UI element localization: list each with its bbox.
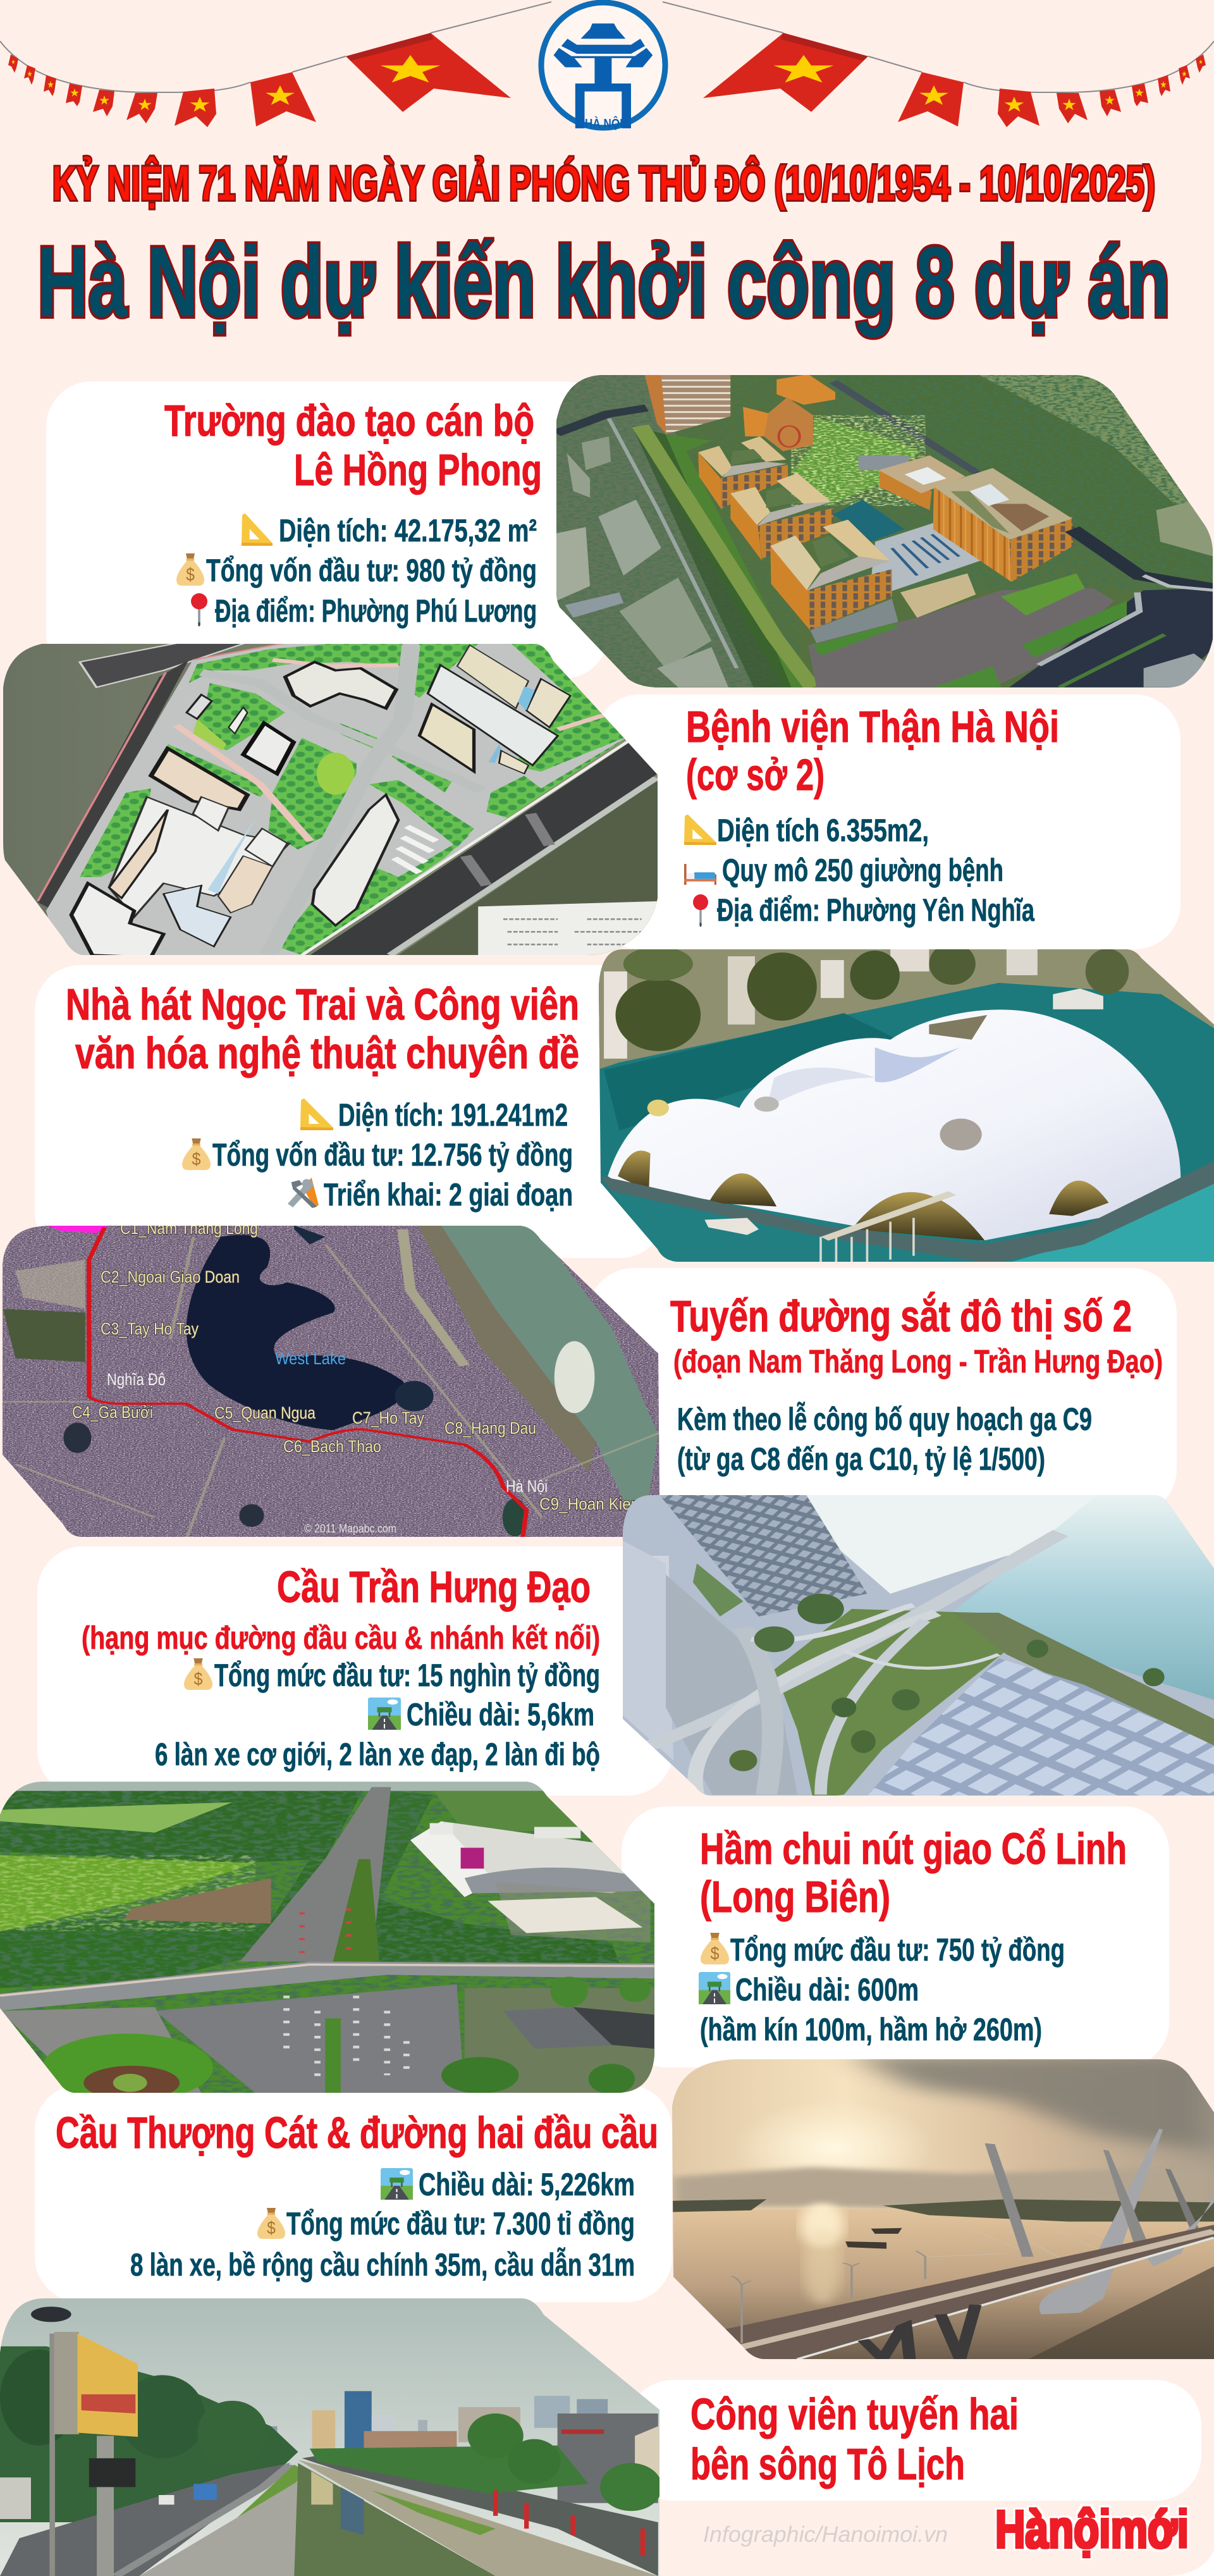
photo: Tô Lịch river <box>0 2296 670 2576</box>
heading: Công viên tuyến hai <box>690 2389 1019 2439</box>
facts: Tổng mức đầu tư: 750 tỷ đồng <box>730 1932 1065 1968</box>
heading: Lê Hồng Phong <box>294 445 542 495</box>
map labels: Nghĩa Đô <box>107 1370 166 1389</box>
heading <box>690 2389 1019 2489</box>
facts: Triển khai: 2 giai đoạn <box>324 1177 573 1212</box>
photo: campus render <box>555 373 1214 689</box>
photo: Thượng Cát bridge sunset render <box>666 2055 1214 2362</box>
facts: Tổng vốn đầu tư: 12.756 tỷ đồng <box>212 1137 573 1173</box>
map labels: C1_Nam Thang Long <box>120 1219 258 1238</box>
map: metro line 2 route <box>0 1219 666 1540</box>
map labels: C7_Ho Tay <box>352 1408 424 1427</box>
map labels: C2_Ngoai Giao Doan <box>101 1267 240 1286</box>
facts: 8 làn xe, bề rộng cầu chính 35m, cầu dẫn 31m <box>130 2247 635 2283</box>
map labels: C6_Bach Thao <box>283 1437 381 1456</box>
panel: Cầu Trần Hưng Đạo <box>37 1546 673 1796</box>
logo: Hà Nội emblem: HÀ NỘI <box>585 116 623 131</box>
facts <box>155 1658 600 1772</box>
map labels: West Lake <box>275 1349 346 1368</box>
map labels: C4_Ga Bưởi <box>72 1403 153 1422</box>
photo: pearl theatre render <box>589 943 1214 1266</box>
heading: Cầu Thượng Cát & đường hai đầu cầu <box>56 2108 658 2157</box>
facts: Diện tích 6.355m2, <box>717 813 929 848</box>
heading: Trường đào tạo cán bộ <box>164 396 534 445</box>
bunting: right flags <box>663 2 1214 127</box>
facts: (từ ga C8 đến ga C10, tỷ lệ 1/500) <box>677 1441 1045 1477</box>
heading <box>686 702 1059 799</box>
facts <box>182 1097 573 1212</box>
panel: Hầm chui nút giao Cổ Linh <box>622 1806 1169 2068</box>
heading <box>164 396 542 495</box>
facts <box>130 2167 635 2283</box>
photo: Cổ Linh interchange aerial <box>0 1780 662 2102</box>
facts <box>677 1402 1092 1477</box>
panel: Bệnh viện Thận Hà Nội <box>594 694 1180 949</box>
heading <box>82 1562 600 1656</box>
heading <box>700 1824 1127 1921</box>
map labels: C8_Hang Dau <box>445 1419 536 1438</box>
credit: Infographic/Hanoimoi.vn <box>703 2522 948 2547</box>
facts: Địa điểm: Phường Yên Nghĩa <box>717 892 1035 928</box>
facts: Chiều dài: 5,6km <box>407 1697 594 1732</box>
heading: Bệnh viện Thận Hà Nội <box>686 702 1059 751</box>
photo: hospital site plan <box>0 641 658 957</box>
bunting: left flags <box>0 2 551 127</box>
facts <box>684 813 1035 928</box>
facts <box>176 513 537 629</box>
heading: Cầu Trần Hưng Đạo <box>277 1562 591 1612</box>
map labels <box>72 1219 644 1535</box>
heading: (cơ sở 2) <box>686 750 825 799</box>
photo: Trần Hưng Đạo bridge render <box>620 1493 1214 1799</box>
map labels: © 2011 Mapabc.com <box>304 1522 396 1535</box>
facts: Địa điểm: Phường Phú Lương <box>215 593 537 629</box>
heading: Nhà hát Ngọc Trai và Công viên <box>66 980 579 1029</box>
logo: Hà Nội emblem <box>541 3 665 131</box>
heading: bên sông Tô Lịch <box>690 2439 965 2489</box>
facts: Diện tích: 42.175,32 m² <box>279 513 537 548</box>
facts: Tổng mức đầu tư: 15 nghìn tỷ đồng <box>214 1658 600 1693</box>
map labels: C9_Hoan Kiem <box>539 1494 644 1513</box>
facts: Tổng vốn đầu tư: 980 tỷ đồng <box>206 553 537 588</box>
heading <box>66 980 579 1078</box>
facts: Diện tích: 191.241m2 <box>338 1097 568 1133</box>
heading <box>670 1291 1163 1379</box>
panel: Tuyến đường sắt đô thị số 2 <box>588 1268 1177 1515</box>
facts: Tổng mức đầu tư: 7.300 tỉ đồng <box>286 2206 635 2241</box>
heading: (Long Biên) <box>700 1872 890 1921</box>
facts: (hầm kín 100m, hầm hở 260m) <box>700 2012 1042 2047</box>
facts <box>699 1932 1065 2047</box>
facts: Chiều dài: 5,226km <box>419 2167 635 2202</box>
panel: Trường đào tạo cán bộ Lê Hồng Phong <box>46 381 609 679</box>
map labels: C3_Tay Ho Tay <box>101 1319 199 1338</box>
map labels: Hà Nội <box>506 1477 548 1496</box>
facts: 6 làn xe cơ giới, 2 làn xe đạp, 2 làn đi bộ <box>155 1737 600 1772</box>
panel: Cầu Thượng Cát <box>35 2085 672 2302</box>
panel: Nhà hát Ngọc Trai <box>35 965 666 1258</box>
map labels: C5_Quan Ngua <box>214 1403 316 1422</box>
heading: (hạng mục đường đầu cầu & nhánh kết nối) <box>82 1620 600 1656</box>
facts: Quy mô 250 giường bệnh <box>722 853 1003 888</box>
facts: Chiều dài: 600m <box>735 1972 919 2007</box>
panel: Công viên tuyến hai bên sông Tô Lịch <box>627 2380 1201 2501</box>
heading: văn hóa nghệ thuật chuyên đề <box>75 1028 579 1078</box>
